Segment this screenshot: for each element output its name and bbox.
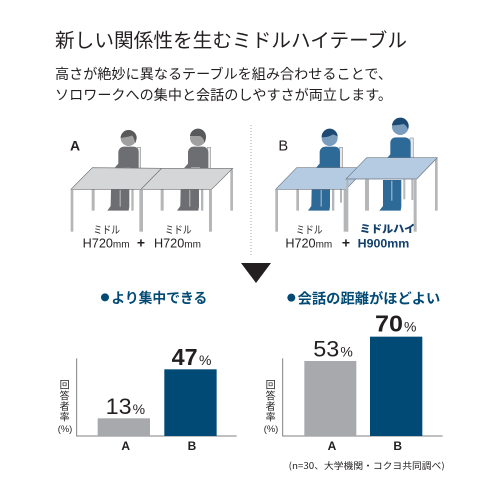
- intro text: ソロワークへの集中と会話のしやすさが両立します。: [55, 85, 392, 105]
- person 1: [308, 129, 343, 211]
- heading: より集中できる: [111, 288, 207, 308]
- heading: 会話の距離がほどよい: [298, 288, 440, 308]
- axis label: 答: [266, 387, 276, 402]
- table labels: H720mm: [285, 236, 332, 250]
- axis label: [264, 377, 278, 434]
- value 53%: 53: [313, 336, 339, 361]
- value 47%: 47: [172, 344, 198, 370]
- table labels: ミドル: [93, 222, 120, 237]
- panel: chart focus: [58, 288, 237, 453]
- value 47%: %: [199, 352, 211, 368]
- value 13%: [106, 394, 145, 419]
- person 1: [107, 130, 141, 211]
- bar B: [164, 369, 217, 436]
- value 53%: [313, 336, 353, 361]
- category labels: [121, 439, 197, 453]
- bar B: [370, 337, 422, 436]
- label B: B: [278, 138, 288, 154]
- high table front legs: [346, 180, 417, 232]
- bar A: [304, 361, 356, 436]
- table labels: ミドル: [165, 222, 192, 237]
- axis label: (%): [264, 424, 278, 434]
- axis label: 者: [266, 398, 276, 413]
- table labels: ミドルハイ: [360, 222, 415, 237]
- table labels: ミドル: [296, 222, 323, 237]
- table legs rear: [92, 169, 233, 211]
- panel: chart conversation: [264, 288, 445, 472]
- person 2: [177, 129, 211, 211]
- high table top: [346, 158, 437, 179]
- table labels: H720mm: [83, 236, 130, 250]
- high table rear legs: [365, 158, 438, 211]
- axis label: 率: [60, 409, 70, 424]
- table labels: +: [342, 235, 350, 251]
- intro text: 高さが絶妙に異なるテーブルを組み合わせることで、: [55, 64, 392, 84]
- value 13%: %: [133, 401, 145, 417]
- axis: [283, 358, 443, 436]
- category labels: B: [393, 439, 402, 453]
- axis label: 率: [266, 409, 276, 424]
- table labels: [83, 222, 201, 251]
- table tops: [71, 168, 233, 189]
- table legs front: [71, 190, 212, 232]
- source note: (n=30、大学機関・コクヨ共同調べ): [289, 459, 445, 472]
- value 70%: 70: [375, 311, 403, 337]
- axis label: 回: [266, 377, 276, 392]
- axis label: 者: [60, 398, 70, 413]
- value 53%: %: [340, 343, 353, 359]
- value 13%: 13: [106, 394, 132, 419]
- axis label: (%): [58, 424, 72, 434]
- value 70%: [375, 311, 416, 337]
- value 47%: [172, 344, 211, 370]
- table labels: H720mm: [154, 236, 201, 250]
- table labels: +: [137, 235, 145, 251]
- title: 新しい関係性を生むミドルハイテーブル: [55, 24, 407, 53]
- person 2: [379, 118, 413, 211]
- label A: A: [70, 137, 80, 153]
- axis label: [58, 377, 72, 434]
- low table front legs: [275, 190, 347, 232]
- low table rear legs: [296, 189, 342, 211]
- category labels: [328, 439, 402, 453]
- axis label: 回: [60, 377, 70, 392]
- low table top: [276, 168, 367, 189]
- table labels: H900mm: [358, 236, 409, 250]
- intro text: [55, 64, 392, 105]
- value 70%: %: [404, 319, 416, 335]
- category labels: B: [188, 439, 197, 453]
- panel: option A illustration: [70, 129, 233, 251]
- arrow: down triangle: [241, 263, 271, 283]
- axis: [77, 358, 237, 436]
- bar A: [98, 418, 150, 436]
- panel: option B illustration: [275, 118, 438, 251]
- category labels: A: [121, 439, 130, 453]
- divider: [250, 125, 252, 257]
- table labels: [285, 222, 415, 251]
- axis label: 答: [60, 387, 70, 402]
- category labels: A: [328, 439, 337, 453]
